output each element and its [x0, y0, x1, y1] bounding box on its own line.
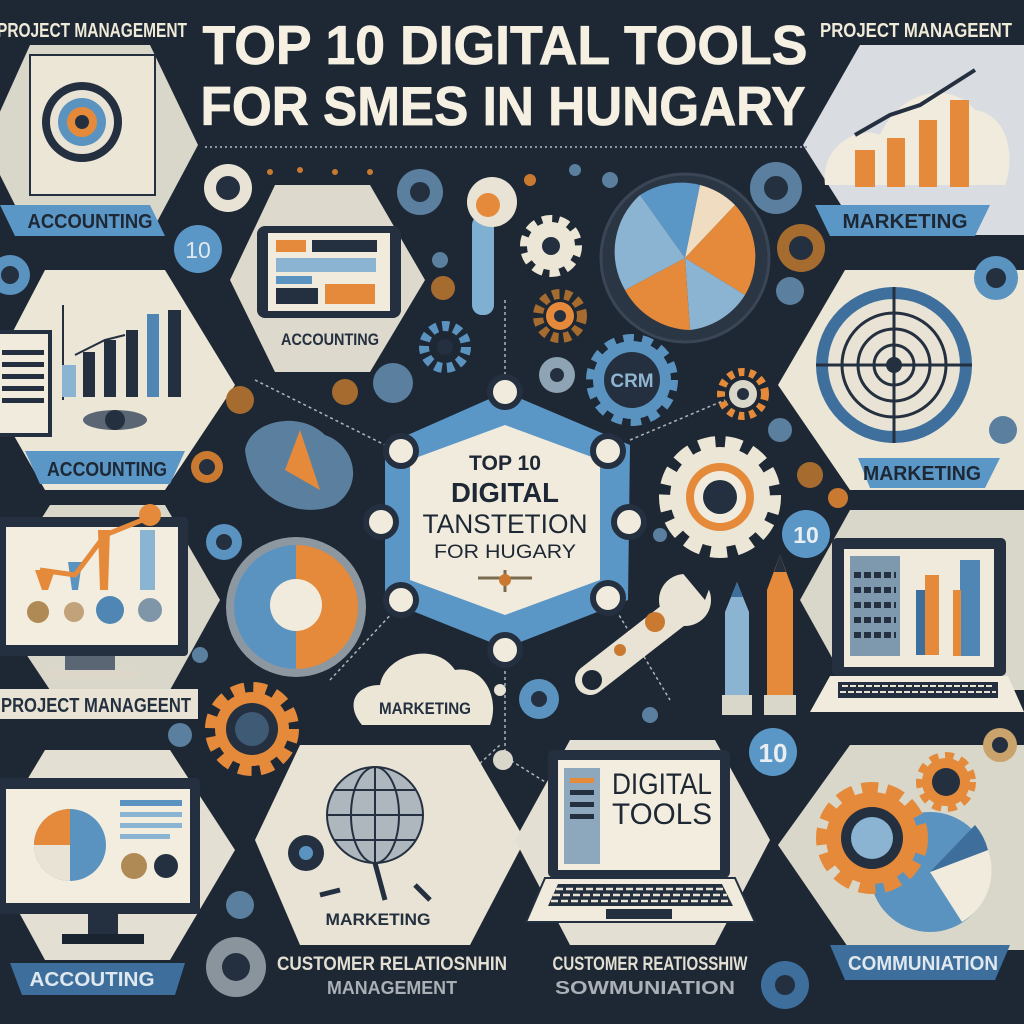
icon: cloud marketing [354, 654, 493, 725]
label: customer communication bottom: CUSTOMER REATIOSSHIW [552, 954, 748, 975]
title [200, 14, 808, 137]
central hexagon badge: DIGITAL [451, 477, 559, 508]
panel: laptop charts right [800, 510, 1024, 712]
panel: laptop digital tools: TOOLS [612, 798, 712, 831]
decorative small shapes [168, 164, 1017, 919]
label: customer communication bottom: SOWMUNIATION [555, 978, 735, 998]
icon: orange small gear right [721, 372, 765, 416]
connector lines [255, 300, 725, 810]
pie chart top center [601, 174, 769, 342]
central hexagon badge [366, 377, 644, 665]
label: project management middle left: PROJECT MANAGEENT [1, 695, 191, 717]
title: FOR SMES IN HUNGARY [200, 75, 806, 137]
label: project management middle left [0, 689, 198, 719]
panel: monitor chart left [0, 504, 220, 690]
panel: tablet accounting [230, 185, 425, 372]
panel: target marketing right: MARKETING [863, 463, 981, 485]
badge: 10 left: 10 [185, 237, 211, 263]
icon: blue gear [424, 326, 466, 368]
panel: globe marketing: MARKETING [326, 910, 430, 929]
icon: pencil blue [722, 582, 752, 715]
panel: dashboard bottom left [0, 750, 235, 995]
central hexagon badge: FOR HUGARY [434, 542, 576, 563]
label: customer relationship bottom: CUSTOMER RELATIOSNHIN [277, 954, 507, 975]
label: customer relationship bottom [277, 954, 507, 998]
icon: cream gear top [527, 222, 575, 270]
panel: gears pie communication: COMMUNIATION [848, 953, 998, 975]
panel: tablet accounting: ACCOUNTING [281, 330, 379, 349]
panel: laptop digital tools [515, 740, 770, 945]
icon: CRM gear [592, 340, 672, 420]
panel: dashboard bottom left: ACCOUTING [30, 969, 154, 991]
panel: marketing top right: MARKETING [842, 211, 968, 233]
panel: accounting top left [0, 45, 198, 236]
badge: 10 bottom: 10 [759, 738, 787, 768]
donut chart [226, 537, 366, 677]
panel: bar chart accounting left [0, 270, 235, 490]
title: TOP 10 DIGITAL TOOLS [202, 14, 808, 76]
central hexagon badge: TOP 10 [469, 452, 541, 475]
icon: large gear right [670, 447, 770, 547]
label: customer communication bottom [552, 954, 748, 998]
label: customer relationship bottom: MANAGEMENT [327, 978, 457, 998]
panel: marketing top right [803, 45, 1024, 236]
badge: 10 bottom [749, 728, 797, 776]
icon: abstract blob left [245, 421, 353, 510]
panel: gears pie communication [778, 745, 1024, 980]
panel: target marketing right [778, 270, 1024, 490]
panel: laptop digital tools: DIGITAL [612, 768, 712, 801]
icon: CRM gear: CRM [610, 371, 654, 392]
header label: project management left: PROJECT MANAGEMENT [0, 20, 187, 42]
icon: orange gear left [214, 691, 290, 767]
icon: wrench [582, 560, 720, 690]
title divider dotted line [205, 146, 810, 148]
icon: pencil orange [764, 555, 796, 715]
icon: pin top center [467, 177, 517, 315]
badge: 10 right [782, 510, 830, 558]
panel: accounting top left: ACCOUNTING [28, 211, 152, 233]
panel: globe marketing [255, 745, 525, 945]
panel: bar chart accounting left: ACCOUNTING [47, 459, 167, 481]
badge: 10 left [174, 225, 222, 273]
badge: 10 right: 10 [793, 522, 819, 548]
icon: cloud marketing: MARKETING [379, 699, 471, 718]
icon: brown gear [538, 294, 582, 338]
central hexagon badge: TANSTETION [422, 509, 588, 539]
